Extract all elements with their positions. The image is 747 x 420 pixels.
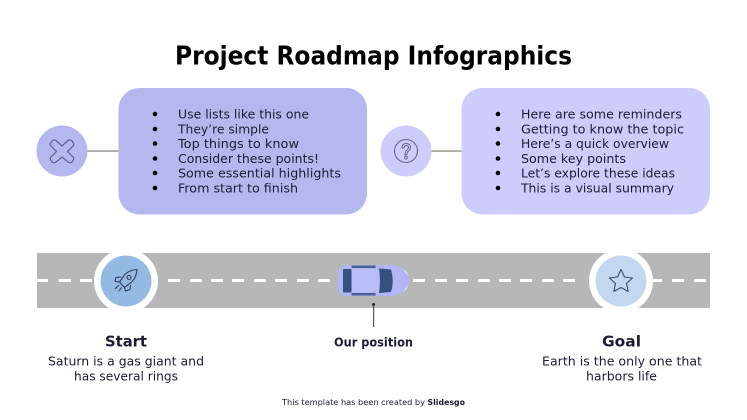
title: Project Roadmap Infographics	[175, 42, 572, 72]
icon: rocket at start	[94, 249, 158, 313]
goal label	[542, 332, 702, 383]
start label: has several rings	[74, 368, 178, 383]
footer credit: This template has been created by	[281, 398, 425, 407]
panel: left list	[118, 88, 367, 214]
road	[37, 253, 710, 308]
start label	[48, 332, 204, 383]
icon: car on road	[337, 265, 410, 296]
panel: right list: Some key points	[521, 151, 626, 166]
icon: question mark in circle	[380, 126, 432, 176]
panel: left list: Consider these points!	[178, 151, 319, 166]
panel: right list: Getting to know the topic	[521, 121, 684, 136]
panel: left list: From start to finish	[178, 180, 298, 195]
panel: right list: Here are some reminders	[521, 106, 682, 121]
icon: star at goal	[589, 249, 653, 313]
footer credit: Slidesgo	[428, 398, 466, 407]
panel: right list: Here’s a quick overview	[521, 136, 669, 151]
our position label: Our position	[334, 334, 413, 349]
goal label: Goal	[602, 332, 641, 350]
panel: left list: Top things to know	[177, 136, 299, 151]
panel: left list: They’re simple	[177, 121, 269, 136]
connector: left icon to left panel	[87, 150, 119, 152]
goal label: harbors life	[586, 368, 657, 383]
goal label: Earth is the only one that	[542, 353, 702, 368]
connector: right icon to right panel	[431, 150, 463, 152]
panel: left list: Some essential highlights	[178, 165, 341, 180]
panel: right list: This is a visual summary	[520, 180, 675, 195]
icon: cross in circle	[36, 126, 88, 176]
start label: Saturn is a gas giant and	[48, 353, 204, 368]
pointer: our position	[372, 303, 375, 327]
panel: right list	[462, 88, 710, 214]
start label: Start	[105, 332, 148, 350]
panel: left list: Use lists like this one	[178, 106, 309, 121]
panel: right list: Let’s explore these ideas	[521, 165, 675, 180]
